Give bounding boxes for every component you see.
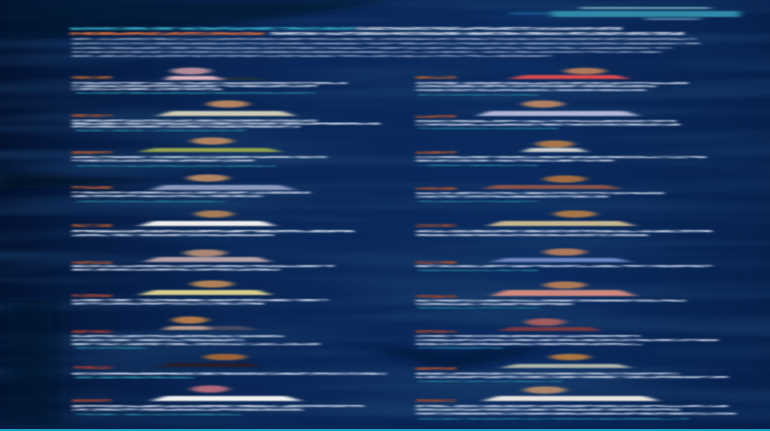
profile 8 xyxy=(72,316,320,349)
bottom accent strip xyxy=(0,429,770,431)
profile 18 xyxy=(416,318,718,349)
profile 11 xyxy=(416,68,688,96)
profile 16 xyxy=(416,248,712,271)
profile 7 xyxy=(72,280,328,305)
logo xyxy=(510,7,740,20)
profile 4 xyxy=(72,174,310,202)
profile 15 xyxy=(416,210,712,236)
profile 12 xyxy=(416,100,680,129)
title xyxy=(70,27,684,35)
profile 20 xyxy=(416,386,736,420)
profile 1 xyxy=(72,68,347,94)
profile 17 xyxy=(416,281,686,309)
profile 13 xyxy=(416,140,706,166)
right column profiles xyxy=(416,68,736,420)
profile 5 xyxy=(72,210,354,236)
profile 9 xyxy=(72,354,386,378)
intro text xyxy=(72,38,700,57)
profile 10 xyxy=(72,385,364,416)
left column profiles xyxy=(72,68,386,416)
profile 14 xyxy=(416,175,664,202)
profile 3 xyxy=(72,137,327,167)
profile 19 xyxy=(416,354,728,382)
profile 2 xyxy=(72,100,380,132)
profile 6 xyxy=(72,249,334,271)
